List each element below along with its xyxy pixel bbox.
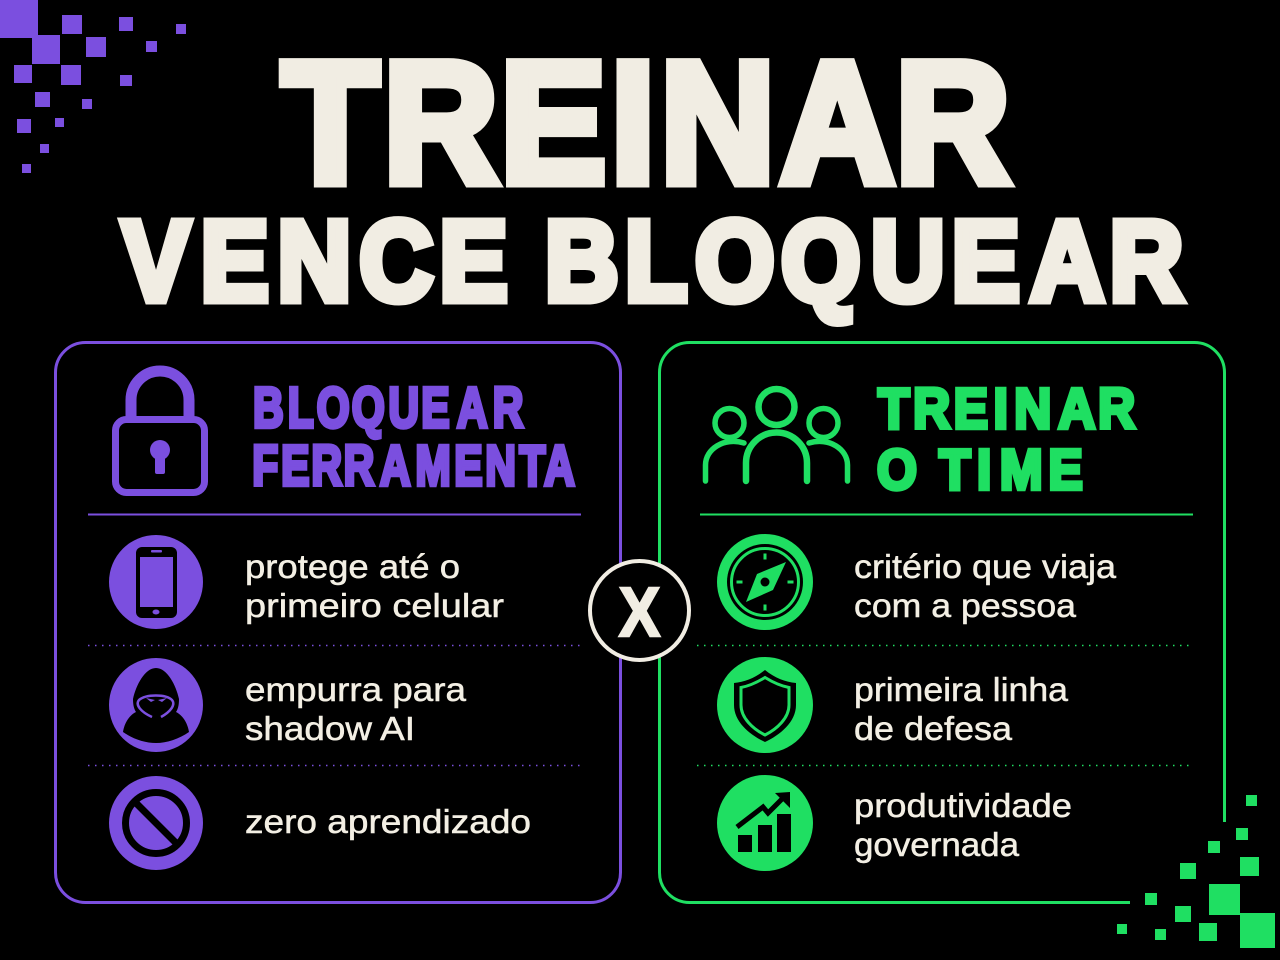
heading: treinar o time xyxy=(877,378,1135,502)
text: protege até o primeiro celular: protege até o xyxy=(245,548,460,585)
icon: prohibited sign xyxy=(109,776,203,870)
icon: growth chart xyxy=(717,775,813,871)
text: critério que viaja com a pessoa xyxy=(854,548,1117,624)
icon: padlock xyxy=(116,371,204,492)
title: TREINAR xyxy=(282,27,1010,219)
text: produtividade governada: produtividade xyxy=(854,787,1072,824)
icon: hooded figure xyxy=(109,658,203,752)
icon: compass xyxy=(717,534,813,630)
text: critério que viaja com a pessoa: com a pessoa xyxy=(854,587,1077,624)
decoration: green pixels xyxy=(1117,795,1275,948)
text: produtividade governada: governada xyxy=(854,826,1020,863)
heading: bloquear ferramenta: FERRAMENTA xyxy=(252,434,575,498)
text: empurra para shadow AI xyxy=(245,671,467,747)
heading: bloquear ferramenta: BLOQUEAR xyxy=(253,376,523,440)
heading: treinar o time: O TIME xyxy=(877,439,1083,502)
icon: smartphone xyxy=(109,535,203,629)
title: VENCE BLOQUEAR xyxy=(122,198,1183,324)
text: primeira linha de defesa: primeira linha xyxy=(854,671,1069,708)
versus badge xyxy=(590,561,689,660)
heading: treinar o time: TREINAR xyxy=(878,378,1135,441)
text: protege até o primeiro celular xyxy=(245,548,504,624)
panel: treinar o time xyxy=(660,342,1224,902)
text: empurra para shadow AI: shadow AI xyxy=(245,710,415,747)
title xyxy=(122,27,1183,324)
text: primeira linha de defesa: de defesa xyxy=(854,710,1013,747)
panel: bloquear ferramenta xyxy=(56,342,620,902)
text: produtividade governada xyxy=(854,787,1072,863)
icon: shield xyxy=(717,657,813,753)
decoration: purple pixels xyxy=(0,0,186,173)
text: zero aprendizado: zero aprendizado xyxy=(245,803,531,840)
icon: team of people xyxy=(706,389,848,481)
text: protege até o primeiro celular: primeiro celular xyxy=(245,587,504,624)
heading: bloquear ferramenta xyxy=(252,376,575,498)
versus badge: X xyxy=(619,572,660,651)
text: empurra para shadow AI: empurra para xyxy=(245,671,467,708)
text: primeira linha de defesa xyxy=(854,671,1069,747)
panel frame: green xyxy=(660,342,1224,902)
text: critério que viaja com a pessoa: critério que viaja xyxy=(854,548,1117,585)
panel frame: purple xyxy=(56,342,620,902)
